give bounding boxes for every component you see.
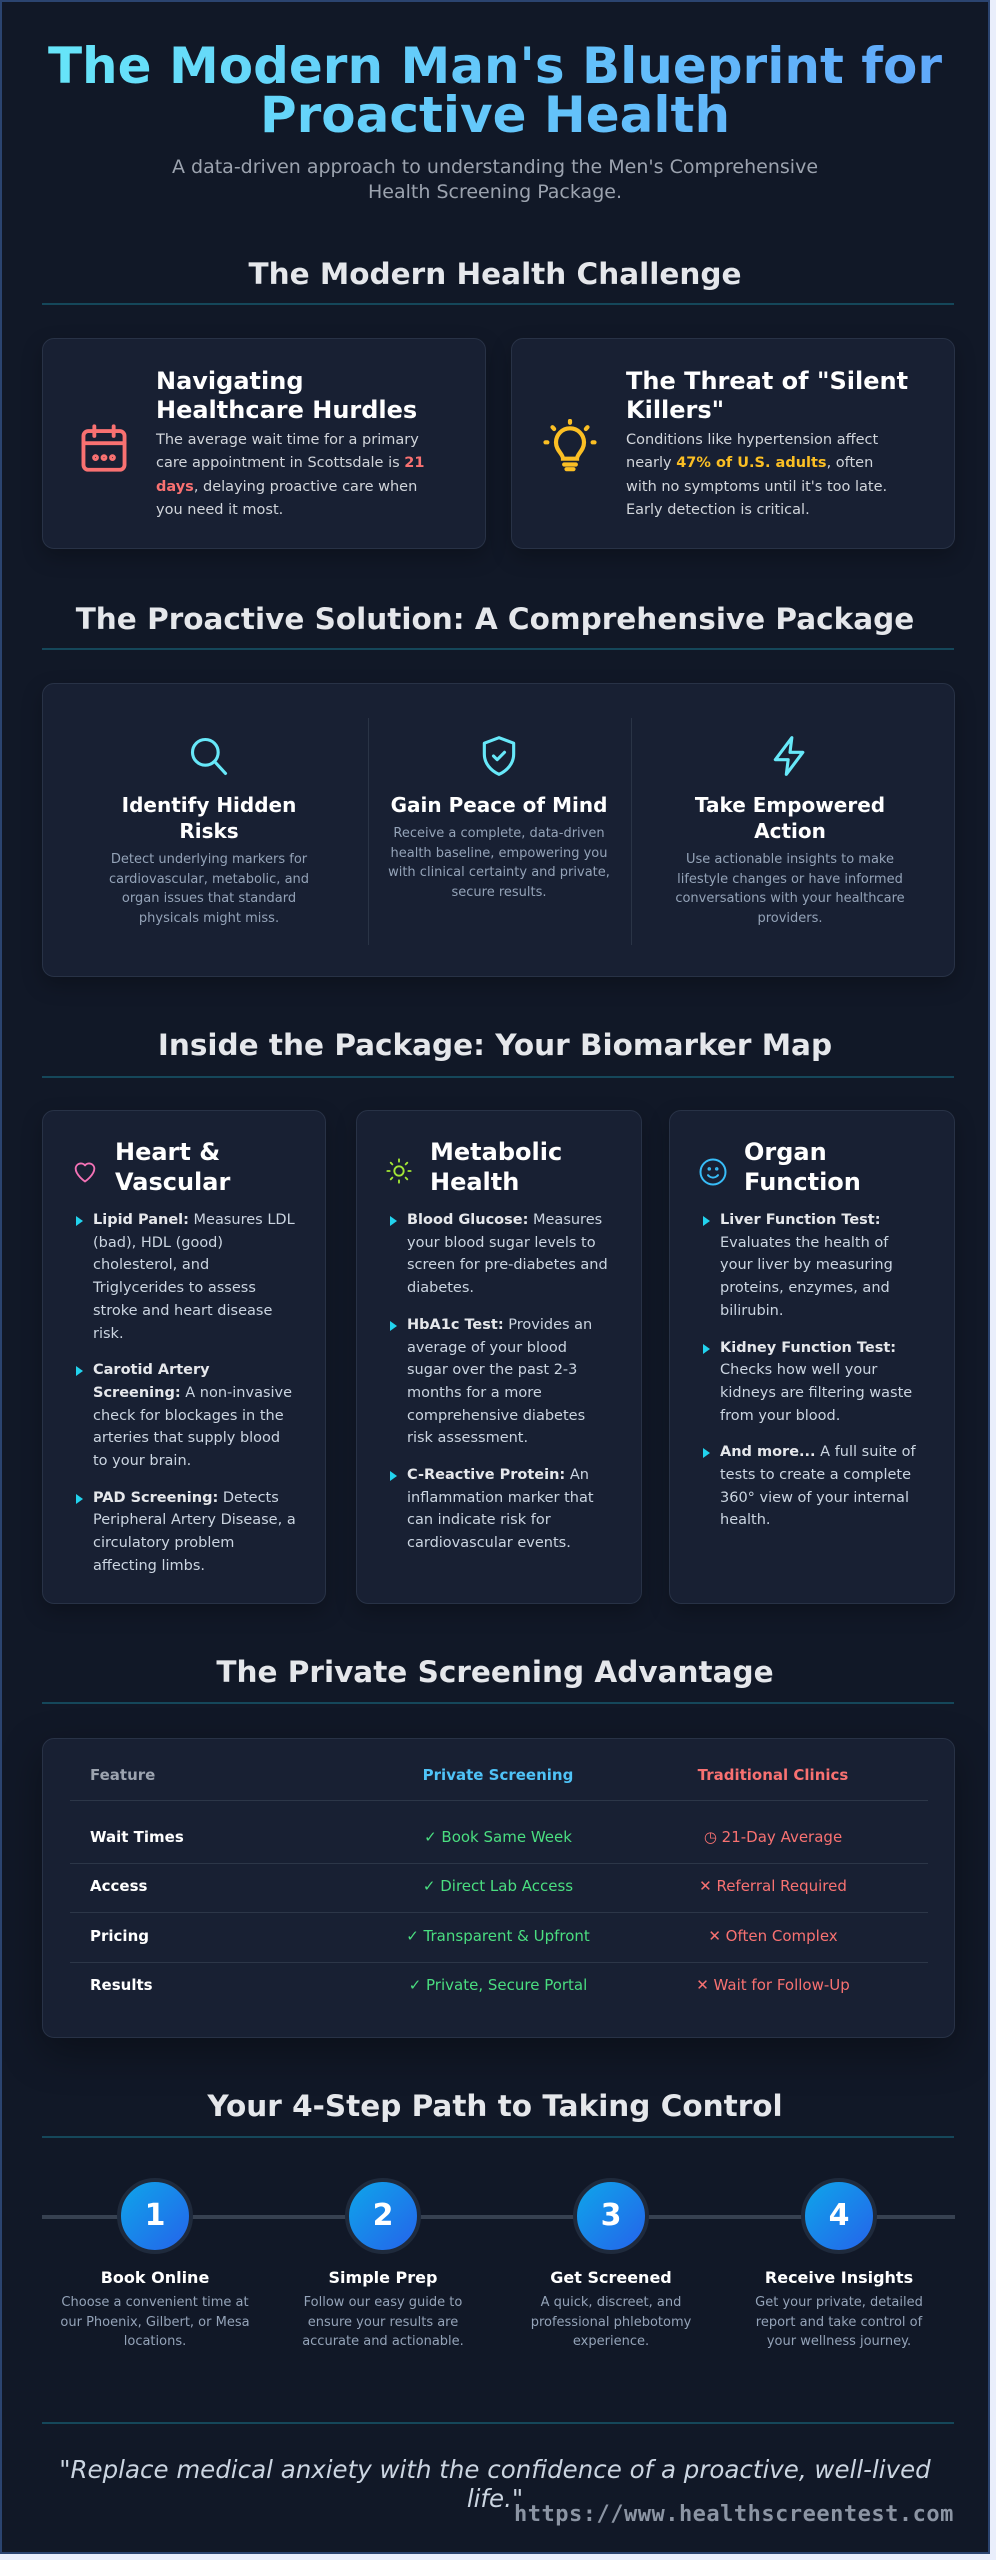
- text block: Killers": [626, 396, 724, 424]
- quote: [59, 2455, 931, 2513]
- comparison table: ✕ Wait for Follow-Up: [696, 1976, 850, 1994]
- step 3: professional phlebotomy: [531, 2314, 691, 2330]
- column: empowered action: conversations with your healthcare: [675, 891, 905, 906]
- biomarker list: average of your blood: [407, 1340, 567, 1356]
- biomarker list: cholesterol, and: [93, 1257, 209, 1273]
- step 2: 2: [373, 2198, 393, 2233]
- step 1: 1: [145, 2198, 165, 2233]
- title: The Modern Man's Blueprint for: [48, 37, 942, 95]
- biomarker list: bilirubin.: [720, 1303, 783, 1319]
- biomarker list: [390, 1212, 608, 1551]
- panel: heart & vascular: [42, 1110, 326, 1604]
- text block: care appointment in Scottsdale is 21: [156, 455, 424, 471]
- biomarker list: can indicate risk for: [407, 1512, 551, 1528]
- step 2: [302, 2178, 464, 2349]
- quote: "Replace medical anxiety with the confidence of a proactive, well-lived: [59, 2455, 931, 2484]
- biomarker list: [703, 1212, 916, 1528]
- step 1: our Phoenix, Gilbert, or Mesa: [60, 2314, 250, 2330]
- biomarker list: Liver Function Test:: [720, 1212, 881, 1228]
- comparison table: Traditional Clinics: [698, 1766, 848, 1784]
- biomarker list: Checks how well your: [720, 1362, 877, 1378]
- timeline line: [42, 2215, 955, 2219]
- text block: nearly 47% of U.S. adults, often: [626, 455, 873, 471]
- biomarker list: screen for pre-diabetes and: [407, 1257, 608, 1273]
- comparison table: ✓ Transparent & Upfront: [406, 1927, 590, 1945]
- heading: 4-step path: Your 4-Step Path to Taking Control: [207, 2089, 783, 2123]
- column: identify hidden risks: cardiovascular, metabolic, and: [109, 872, 309, 887]
- step 1: [60, 2178, 250, 2349]
- text block: [626, 367, 908, 518]
- comparison table: ✕ Referral Required: [699, 1877, 847, 1895]
- biomarker list: to your brain.: [93, 1453, 191, 1469]
- column: empowered action: [675, 736, 905, 926]
- text block: The average wait time for a primary: [156, 432, 419, 448]
- biomarker list: cardiovascular events.: [407, 1535, 571, 1551]
- url footer: https://www.healthscreentest.com: [514, 2502, 954, 2527]
- row: pricing: Pricing: [90, 1927, 149, 1945]
- column: identify hidden risks: [109, 738, 309, 926]
- step 3: Get Screened: [550, 2268, 672, 2287]
- comparison table: Private Screening: [423, 1766, 573, 1784]
- row: results: Results: [90, 1976, 153, 1994]
- title: [2, 42, 988, 140]
- biomarker list: tests to create a complete: [720, 1467, 911, 1483]
- column: peace of mind: Receive a complete, data-driven: [393, 826, 605, 841]
- card title: [430, 1138, 562, 1196]
- biomarker list: Peripheral Artery Disease, a: [93, 1512, 296, 1528]
- heading: the modern health challenge: The Modern Health Challenge: [248, 257, 741, 291]
- biomarker list: sugar over the past 2-3: [407, 1362, 577, 1378]
- biomarker list: Kidney Function Test:: [720, 1340, 896, 1356]
- panel: silent killers: [511, 338, 955, 549]
- table header: Feature: [90, 1766, 155, 1784]
- text block: The Threat of "Silent: [626, 367, 908, 395]
- biomarker list: your liver by measuring: [720, 1257, 893, 1273]
- card title: [115, 1138, 230, 1196]
- biomarker list: arteries that supply blood: [93, 1430, 280, 1446]
- biomarker list: 360° view of your internal: [720, 1490, 909, 1506]
- biomarker list: Blood Glucose: Measures: [407, 1212, 602, 1228]
- step 1: Book Online: [101, 2268, 209, 2287]
- step 2: accurate and actionable.: [302, 2334, 464, 2349]
- step 3: [531, 2178, 691, 2349]
- step 2: Simple Prep: [329, 2268, 437, 2287]
- step 4: [755, 2178, 923, 2349]
- biomarker list: months for a more: [407, 1385, 542, 1401]
- column: identify hidden risks: Risks: [179, 819, 239, 843]
- step 2: Follow our easy guide to: [304, 2295, 462, 2310]
- card title: [744, 1138, 861, 1196]
- step 1: Choose a convenient time at: [61, 2295, 249, 2310]
- column: peace of mind: [388, 736, 610, 900]
- column: empowered action: lifestyle changes or have informed: [677, 872, 903, 887]
- biomarker list: HbA1c Test: Provides an: [407, 1317, 592, 1333]
- step 4: 4: [829, 2198, 849, 2233]
- subtitle: [172, 156, 818, 203]
- biomarker list: [76, 1212, 296, 1574]
- text block: you need it most.: [156, 502, 283, 518]
- biomarker list: risk.: [93, 1326, 124, 1342]
- title: Proactive Health: [260, 86, 730, 144]
- comparison table: ✓ Private, Secure Portal: [409, 1976, 587, 1994]
- biomarker list: comprehensive diabetes: [407, 1408, 585, 1424]
- biomarker list: affecting limbs.: [93, 1558, 205, 1574]
- icon: lightning: [774, 736, 804, 776]
- panel: healthcare hurdles: [42, 338, 486, 549]
- column: empowered action: providers.: [757, 911, 823, 926]
- biomarker list: check for blockages in the: [93, 1408, 284, 1424]
- step 4: report and take control of: [756, 2314, 922, 2330]
- column: identify hidden risks: Detect underlying markers for: [111, 852, 307, 867]
- panel: metabolic health: [356, 1110, 642, 1604]
- text block: Conditions like hypertension affect: [626, 432, 878, 448]
- icon: sun: [386, 1158, 412, 1184]
- icon: magnifier: [190, 738, 228, 776]
- biomarker list: Screening: A non-invasive: [93, 1385, 292, 1401]
- biomarker list: PAD Screening: Detects: [93, 1490, 279, 1506]
- text block: with no symptoms until it's too late.: [626, 479, 887, 495]
- step 4: your wellness journey.: [767, 2334, 911, 2349]
- biomarker list: Evaluates the health of: [720, 1235, 888, 1251]
- biomarker list: diabetes.: [407, 1280, 474, 1296]
- column: empowered action: Take Empowered: [695, 793, 885, 817]
- biomarker list: health.: [720, 1512, 771, 1528]
- icon: calendar: [82, 424, 126, 472]
- comparison table: ✓ Direct Lab Access: [423, 1877, 573, 1895]
- column: empowered action: Use actionable insights to make: [686, 852, 894, 867]
- biomarker list: from your blood.: [720, 1408, 840, 1424]
- biomarker list: your blood sugar levels to: [407, 1235, 596, 1251]
- quote: life.": [467, 2484, 523, 2513]
- biomarker list: And more... A full suite of: [720, 1444, 916, 1460]
- heading: inside the package: Inside the Package: Your Biomarker Map: [158, 1028, 832, 1062]
- step 3: experience.: [573, 2334, 649, 2349]
- biomarker list: inflammation marker that: [407, 1490, 594, 1506]
- step 4: Receive Insights: [765, 2268, 913, 2287]
- comparison table: ◷ 21-Day Average: [704, 1828, 842, 1846]
- biomarker list: Lipid Panel: Measures LDL: [93, 1212, 295, 1228]
- biomarker list: risk assessment.: [407, 1430, 528, 1446]
- subtitle: A data-driven approach to understanding the Men's Comprehensive: [172, 156, 818, 178]
- column: peace of mind: Gain Peace of Mind: [391, 793, 607, 817]
- column: peace of mind: secure results.: [451, 885, 547, 900]
- card title: Vascular: [115, 1168, 230, 1196]
- text block: Early detection is critical.: [626, 502, 810, 518]
- step 3: A quick, discreet, and: [541, 2295, 681, 2310]
- biomarker list: (bad), HDL (good): [93, 1235, 223, 1251]
- icon: shield: [482, 736, 516, 776]
- biomarker list: circulatory problem: [93, 1535, 234, 1551]
- card title: Health: [430, 1168, 519, 1196]
- biomarker list: stroke and heart disease: [93, 1303, 272, 1319]
- column: empowered action: Action: [754, 819, 826, 843]
- comparison table: ✕ Often Complex: [708, 1927, 838, 1945]
- step 4: Get your private, detailed: [755, 2295, 923, 2310]
- biomarker list: Triglycerides to assess: [93, 1280, 256, 1296]
- text block: Navigating: [156, 367, 304, 395]
- card title: Function: [744, 1168, 861, 1196]
- column: peace of mind: with clinical certainty and private,: [388, 865, 610, 880]
- column: identify hidden risks: Identify Hidden: [122, 793, 296, 817]
- column: identify hidden risks: physicals might miss.: [139, 911, 279, 926]
- text block: days, delaying proactive care when: [156, 479, 417, 495]
- row: access: Access: [90, 1877, 147, 1895]
- icon: smiley: [700, 1158, 726, 1186]
- icon: lightbulb: [543, 419, 597, 472]
- panel: proactive solution: [42, 683, 955, 977]
- biomarker list: C-Reactive Protein: An: [407, 1467, 589, 1483]
- comparison table: [42, 1738, 955, 2038]
- card title: Heart &: [115, 1138, 220, 1166]
- card title: Metabolic: [430, 1138, 562, 1166]
- step 2: ensure your results are: [308, 2314, 458, 2330]
- column: peace of mind: health baseline, empowering you: [391, 846, 607, 861]
- heading: private screening advantage: The Private Screening Advantage: [216, 1655, 774, 1689]
- biomarker list: proteins, enzymes, and: [720, 1280, 890, 1296]
- heading: the proactive solution: The Proactive Solution: A Comprehensive Package: [76, 602, 914, 636]
- subtitle: Health Screening Package.: [368, 181, 622, 203]
- text block: Healthcare Hurdles: [156, 396, 417, 424]
- biomarker list: Carotid Artery: [93, 1362, 210, 1378]
- column: identify hidden risks: organ issues that standard: [122, 891, 296, 906]
- comparison table: ✓ Book Same Week: [424, 1828, 572, 1846]
- biomarker list: kidneys are filtering waste: [720, 1385, 912, 1401]
- card title: Organ: [744, 1138, 827, 1166]
- step 1: locations.: [124, 2334, 186, 2349]
- step 3: 3: [601, 2198, 621, 2233]
- row: wait times: Wait Times: [90, 1828, 184, 1846]
- icon: heart: [74, 1162, 96, 1182]
- text block: [156, 367, 424, 518]
- panel: organ function: [669, 1110, 955, 1604]
